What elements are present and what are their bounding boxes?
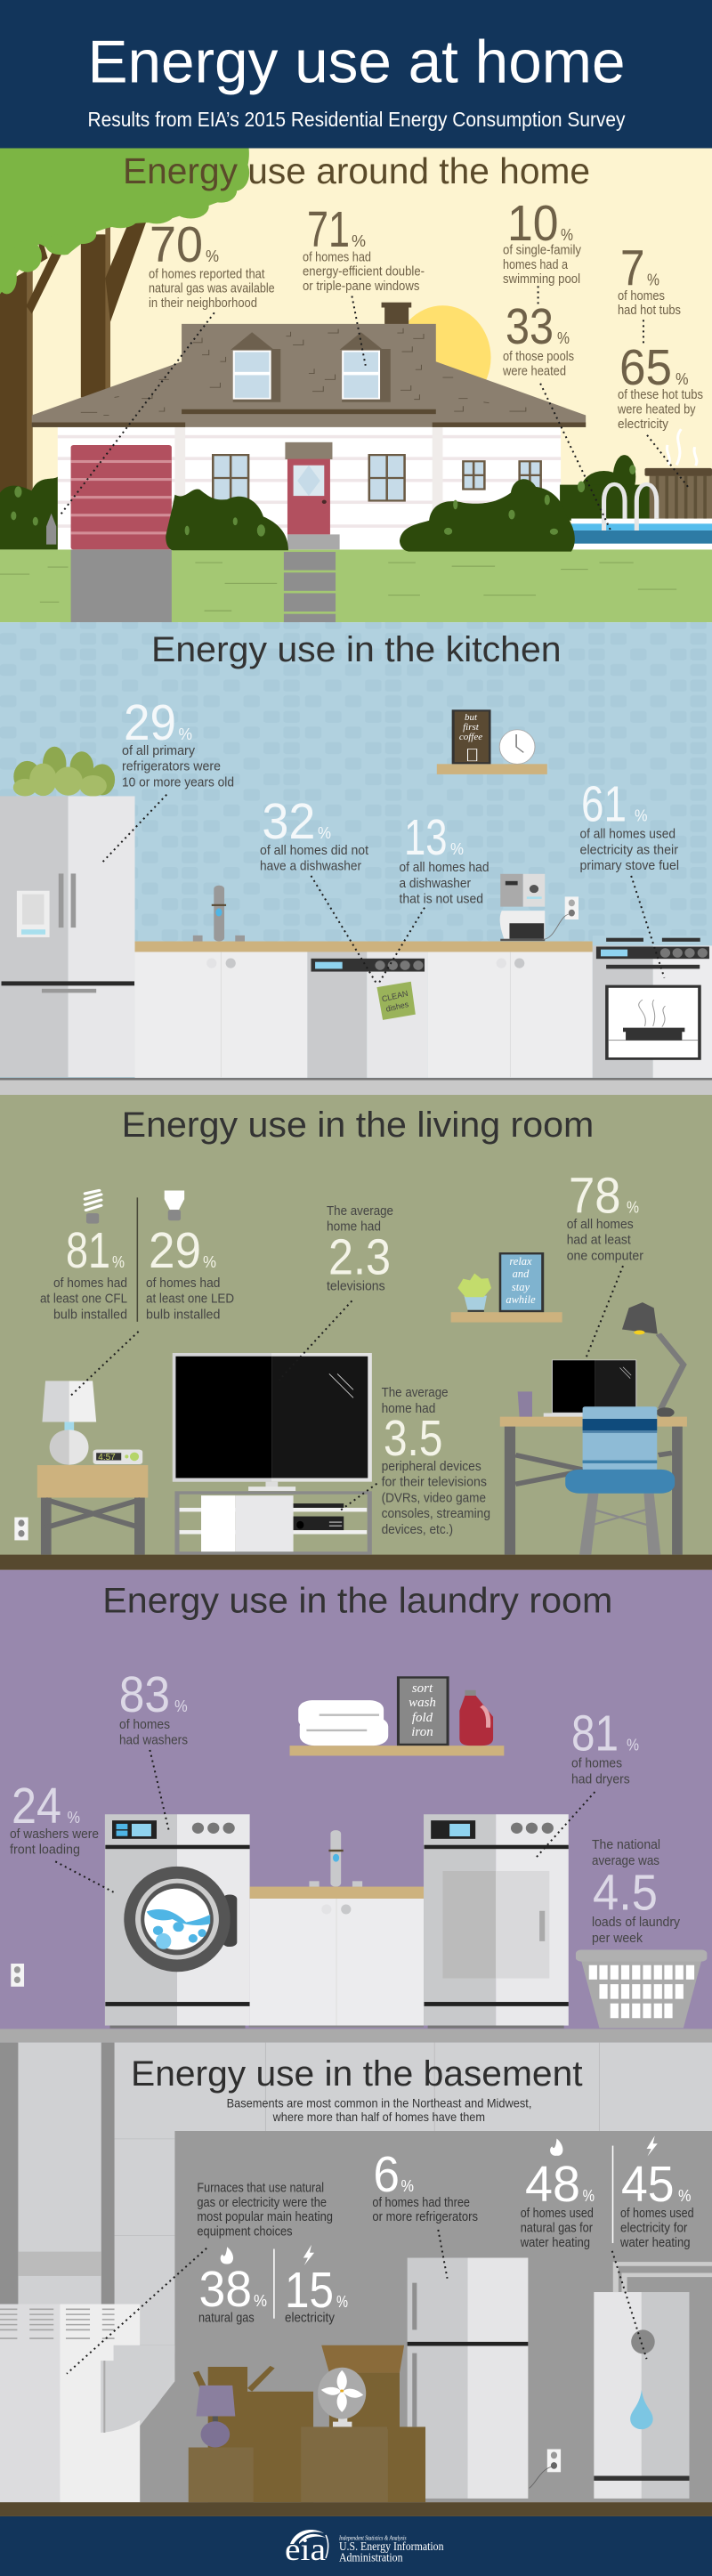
stat: 61%: % xyxy=(635,806,648,824)
frame text xyxy=(409,1681,436,1739)
stat: 4.5 loads xyxy=(592,1837,680,1946)
stat: 15% electricity: % xyxy=(336,2293,348,2311)
stat: 32% xyxy=(260,793,369,874)
stat: 2.3 televisions xyxy=(327,1203,393,1293)
stat: 48% gas water heating: of homes used xyxy=(521,2207,594,2221)
icon: sticky note xyxy=(376,982,416,1020)
stat: 45% electric water heating: of homes used xyxy=(620,2207,694,2221)
stat: 3.5 peripheral devices: The average xyxy=(382,1385,449,1400)
icon: refrigerator xyxy=(0,796,135,1077)
stat: 6% xyxy=(372,2146,478,2224)
stat: 29%: 29 xyxy=(124,694,176,751)
stat: 65%: electricity xyxy=(618,417,668,432)
stat: 81% CFL: 81 xyxy=(66,1222,110,1279)
section heading: Energy use in the living room xyxy=(122,1106,594,1145)
frame text: relax xyxy=(509,1255,532,1268)
stat: 10%: homes had a xyxy=(503,257,569,272)
stat: 2.3 televisions: televisions xyxy=(327,1278,385,1293)
icon: washer xyxy=(105,1814,250,2026)
stat: 61%: primary stove fuel xyxy=(580,858,679,873)
stat: 24% xyxy=(10,1778,99,1858)
agency name: Administration xyxy=(339,2551,402,2564)
icon: desk lamp xyxy=(622,1302,684,1417)
stat: 70%: in their neighborhood xyxy=(149,296,257,311)
furnaces text: Furnaces that use natural xyxy=(197,2182,324,2196)
basement scene illustration xyxy=(0,2038,712,2516)
icon: TV stand xyxy=(177,1493,369,1553)
stat: 3.5 peripheral devices: devices, etc.) xyxy=(382,1522,453,1537)
stat: 29% LED: bulb installed xyxy=(146,1307,220,1322)
stat: 13% xyxy=(399,809,490,906)
stat: 29%: of all primary xyxy=(122,743,195,758)
icon: chair xyxy=(565,1406,675,1555)
icon: wall outlet xyxy=(543,896,578,939)
stat: 71%: 71 xyxy=(307,201,350,258)
stat: 61%: electricity as their xyxy=(580,842,678,857)
stat: 33% xyxy=(502,298,574,378)
leader lines xyxy=(59,286,688,531)
icon: wall shelf with plant and frame xyxy=(451,1252,562,1323)
stat: 48% gas water heating: water heating xyxy=(520,2236,590,2250)
stat: 6%: or more refrigerators xyxy=(372,2210,478,2224)
stat: 24%: % xyxy=(68,1809,80,1827)
note text xyxy=(381,989,411,1014)
stat: 38% natural gas: % xyxy=(254,2292,267,2310)
stat: 38% natural gas: natural gas xyxy=(198,2312,255,2326)
stat: 3.5 peripheral devices: home had xyxy=(382,1401,435,1416)
stat: 71% xyxy=(303,201,425,294)
stat: 48% gas water heating: % xyxy=(583,2187,595,2205)
stat: 15% electricity: electricity xyxy=(285,2312,336,2326)
stat: 29% xyxy=(122,694,234,790)
stat: 29% LED xyxy=(146,1222,234,1322)
section heading: Energy use in the kitchen xyxy=(151,630,562,669)
panel: laundry room xyxy=(0,1570,712,2043)
logo: eia: eia xyxy=(285,2531,326,2567)
agency name xyxy=(338,2534,443,2564)
section heading: Energy use around the home xyxy=(123,150,590,191)
agency name: U.S. Energy Information xyxy=(339,2540,443,2554)
stat: 81% dryers: had dryers xyxy=(571,1771,630,1787)
icon: laptop xyxy=(544,1360,636,1417)
icon: sink cabinet xyxy=(250,1830,424,2026)
stat: 6%: of homes had three xyxy=(372,2196,470,2210)
stat: 65%: % xyxy=(676,370,689,388)
furnaces text xyxy=(197,2182,333,2240)
icon: furnace and duct xyxy=(0,2043,174,2502)
stat: 29% LED: at least one LED xyxy=(146,1291,234,1307)
stat: 10%: % xyxy=(561,226,573,244)
living room scene illustration xyxy=(0,1095,712,1570)
stat: 45% electric water heating: electricity for xyxy=(620,2222,688,2236)
stat: 6%: % xyxy=(400,2177,414,2195)
stat: 15% electricity: 15 xyxy=(285,2262,334,2319)
icon: dryer xyxy=(424,1814,569,2026)
stat: 70%: natural gas was available xyxy=(149,281,275,296)
frame text: coffee xyxy=(459,732,482,742)
stat: 10%: swimming pool xyxy=(503,271,580,287)
icon: side table xyxy=(37,1465,148,1555)
basement intro text xyxy=(227,2095,531,2124)
stat: 78%: 78 xyxy=(569,1168,621,1225)
stat: 4.5 loads: The national xyxy=(592,1837,660,1852)
stat: 4.5 loads: average was xyxy=(592,1853,659,1868)
stat: 83% xyxy=(119,1666,188,1748)
frame text xyxy=(459,712,482,742)
stat: 7%: % xyxy=(647,271,659,288)
stat: 45% electric water heating: water heating xyxy=(619,2236,691,2250)
stat: 83%: had washers xyxy=(119,1733,188,1748)
stat: 71%: of homes had xyxy=(303,249,371,264)
stat: 29% LED: 29 xyxy=(149,1222,201,1279)
stat: 3.5 peripheral devices: for their televisions xyxy=(382,1475,487,1490)
stat: 83%: % xyxy=(174,1697,188,1715)
stat: 78%: of all homes xyxy=(567,1217,634,1232)
icon: television xyxy=(173,1353,372,1491)
stat: 4.5 loads: 4.5 xyxy=(593,1865,658,1922)
stat: 45% electric water heating: % xyxy=(678,2187,691,2205)
furnaces text: most popular main heating xyxy=(197,2210,333,2224)
stat: 24%: front loading xyxy=(10,1843,80,1858)
stat: 6%: 6 xyxy=(373,2146,400,2203)
panel: kitchen xyxy=(0,622,712,1095)
panel: around the home xyxy=(0,149,712,622)
frame text: but xyxy=(465,712,478,723)
stat: 81% dryers: of homes xyxy=(571,1756,622,1771)
stat: 70%: % xyxy=(206,247,219,265)
title: Energy use at home xyxy=(87,28,625,96)
stat: 7%: had hot tubs xyxy=(618,303,681,318)
stat: 2.3 televisions: The average xyxy=(327,1203,393,1219)
stat: 24%: of washers were xyxy=(10,1827,99,1842)
stat: 65%: were heated by xyxy=(617,402,696,417)
panel: living room xyxy=(0,1095,712,1570)
icon: wall outlet xyxy=(11,1964,24,1987)
furnaces text: gas or electricity were the xyxy=(197,2196,327,2210)
stat: 78%: % xyxy=(627,1199,639,1217)
stat: 81% CFL: at least one CFL xyxy=(40,1291,127,1307)
icon: wall outlet xyxy=(529,2449,561,2488)
note text: dishes xyxy=(385,1000,410,1014)
stat: 81% CFL: bulb installed xyxy=(53,1307,127,1322)
stat: 33%: 33 xyxy=(506,298,554,355)
stat: 2.3 televisions: home had xyxy=(327,1219,381,1234)
panel: basement xyxy=(0,2038,712,2516)
stat: 32%: % xyxy=(318,824,331,842)
stat: 10%: 10 xyxy=(507,195,559,252)
icon: cardboard boxes xyxy=(189,2345,425,2502)
stat: 81% CFL: of homes had xyxy=(53,1276,127,1291)
stat: 45% electric water heating xyxy=(619,2156,694,2250)
frame text: fold xyxy=(412,1711,433,1725)
icon: dishwasher xyxy=(307,952,428,1078)
frame text: sort xyxy=(412,1681,433,1696)
icon: shelf with towels, frame and detergent xyxy=(290,1676,504,1755)
stat: 13%: % xyxy=(450,840,464,858)
stat: 81% CFL: % xyxy=(112,1253,125,1271)
frame text: awhile xyxy=(506,1293,536,1306)
stats living room xyxy=(40,1168,643,1537)
stat: 81% dryers xyxy=(571,1705,639,1787)
note text: CLEAN xyxy=(381,989,409,1003)
frame text xyxy=(506,1255,536,1306)
header banner xyxy=(0,0,712,149)
stat: 2.3 televisions: 2.3 xyxy=(328,1228,391,1285)
stat: 3.5 peripheral devices: 3.5 xyxy=(384,1410,442,1467)
icon: water heater xyxy=(594,2264,712,2499)
stat: 70%: of homes reported that xyxy=(149,267,265,281)
stat: 48% gas water heating xyxy=(520,2156,595,2250)
stat: 78%: one computer xyxy=(567,1249,643,1264)
stat: 61%: of all homes used xyxy=(580,826,676,842)
stats around the home xyxy=(149,195,703,432)
stat: 13%: that is not used xyxy=(399,891,483,906)
stat: 65% xyxy=(617,339,703,432)
icon: fan xyxy=(318,2368,366,2426)
basement intro text: Basements are most common in the Northeast and Midwest, xyxy=(227,2095,531,2110)
stat: 3.5 peripheral devices: peripheral devices xyxy=(382,1459,481,1474)
stat: 38% natural gas: 38 xyxy=(199,2261,252,2318)
stats basement xyxy=(197,2146,694,2326)
furnaces text: equipment choices xyxy=(197,2225,293,2240)
stat: 81% dryers: 81 xyxy=(571,1705,619,1762)
subtitle: Results from EIA’s 2015 Residential Energy Consumption Survey xyxy=(87,108,626,131)
stat: 4.5 loads: per week xyxy=(592,1931,643,1946)
stat: 3.5 peripheral devices: (DVRs, video game xyxy=(382,1490,486,1505)
stat: 10%: of single-family xyxy=(503,242,581,257)
icon: purple lamp xyxy=(196,2386,235,2448)
icon: LED bulb xyxy=(165,1190,184,1220)
stat: 48% gas water heating: 48 xyxy=(525,2156,580,2213)
stats laundry xyxy=(10,1666,680,1946)
icon: flame and bolt, furnace xyxy=(221,2245,314,2265)
stat: 45% electric water heating: 45 xyxy=(621,2156,675,2213)
stat: 24%: 24 xyxy=(12,1778,61,1835)
clock display: 4:57 xyxy=(98,1453,116,1462)
icon: wall shelf with frame and clock xyxy=(437,709,547,774)
stat: 65%: 65 xyxy=(619,339,672,396)
stat: 32%: 32 xyxy=(262,793,315,850)
laundry scene illustration xyxy=(0,1570,712,2043)
leader lines xyxy=(55,1750,595,1892)
house scene illustration xyxy=(0,149,712,622)
icon: alarm clock xyxy=(93,1449,142,1464)
stat: 3.5 peripheral devices: consoles, streaming xyxy=(382,1506,490,1521)
stat: 83%: 83 xyxy=(119,1666,170,1723)
leader lines xyxy=(69,1266,623,1511)
stat: 48% gas water heating: natural gas for xyxy=(521,2222,593,2236)
stat: 4.5 loads: loads of laundry xyxy=(592,1915,680,1930)
stat: 33%: were heated xyxy=(502,363,566,378)
basement intro text: where more than half of homes have them xyxy=(272,2110,485,2124)
stat: 61%: 61 xyxy=(581,776,627,833)
stat: 29%: refrigerators were xyxy=(122,759,221,774)
stat: 13%: of all homes had xyxy=(399,860,490,875)
stat: 71%: energy-efficient double- xyxy=(303,263,425,279)
stat: 71%: % xyxy=(352,232,366,250)
section heading: Energy use in the laundry room xyxy=(102,1582,612,1621)
frame text: and xyxy=(513,1268,530,1280)
stat: 33%: % xyxy=(557,329,570,347)
stat: 78%: had at least xyxy=(567,1233,631,1248)
stats kitchen xyxy=(122,694,679,906)
stat: 10% xyxy=(503,195,581,287)
icon: mug xyxy=(518,1391,532,1417)
icon: wall outlet xyxy=(14,1518,28,1540)
icon: oven xyxy=(593,936,712,1078)
stat: 13%: 13 xyxy=(404,809,447,866)
kitchen scene illustration xyxy=(0,622,712,1095)
icon: flame and bolt, water heating xyxy=(550,2135,658,2157)
icon: plant on fridge xyxy=(13,747,115,797)
stat: 71%: or triple-pane windows xyxy=(303,279,419,294)
icon: CFL bulb xyxy=(85,1190,101,1224)
stat: 3.5 peripheral devices xyxy=(382,1385,490,1537)
stat: 83%: of homes xyxy=(119,1717,170,1732)
frame text: stay xyxy=(512,1281,530,1293)
stat: 29%: % xyxy=(178,725,192,743)
footer xyxy=(0,2516,712,2576)
leader lines xyxy=(67,2230,647,2374)
stat: 61% xyxy=(580,776,679,873)
stat: 70%: 70 xyxy=(150,216,203,273)
stat: 78% xyxy=(567,1168,643,1264)
stat: 81% dryers: % xyxy=(627,1737,639,1754)
frame text: first xyxy=(463,722,480,733)
stat: 29%: 10 or more years old xyxy=(122,775,234,790)
stat: 7% xyxy=(618,240,681,318)
section heading: Energy use in the basement xyxy=(131,2054,583,2094)
stat: 70% xyxy=(149,216,275,311)
stat: 7%: of homes xyxy=(618,288,665,304)
stat: 29% LED: % xyxy=(203,1253,216,1271)
agency name: Independent Statistics & Analysis xyxy=(338,2534,407,2542)
stat: 32%: of all homes did not xyxy=(260,843,369,858)
stat: 7%: 7 xyxy=(620,240,644,297)
leader lines xyxy=(101,795,664,984)
stat: 33%: of those pools xyxy=(503,349,574,364)
frame text: wash xyxy=(409,1696,436,1710)
icon: faucet xyxy=(193,886,245,942)
stat: 32%: have a dishwasher xyxy=(260,859,361,874)
icon: refrigerator xyxy=(408,2258,528,2499)
icon: laundry basket xyxy=(576,1949,707,2028)
stat: 81% CFL xyxy=(40,1222,127,1322)
stat: 13%: a dishwasher xyxy=(399,876,471,891)
icon: coffee maker xyxy=(500,874,545,941)
icon: table lamp xyxy=(42,1381,96,1465)
icon: desk xyxy=(500,1417,687,1555)
stat: 29% LED: of homes had xyxy=(146,1276,220,1291)
frame text: iron xyxy=(411,1725,433,1739)
